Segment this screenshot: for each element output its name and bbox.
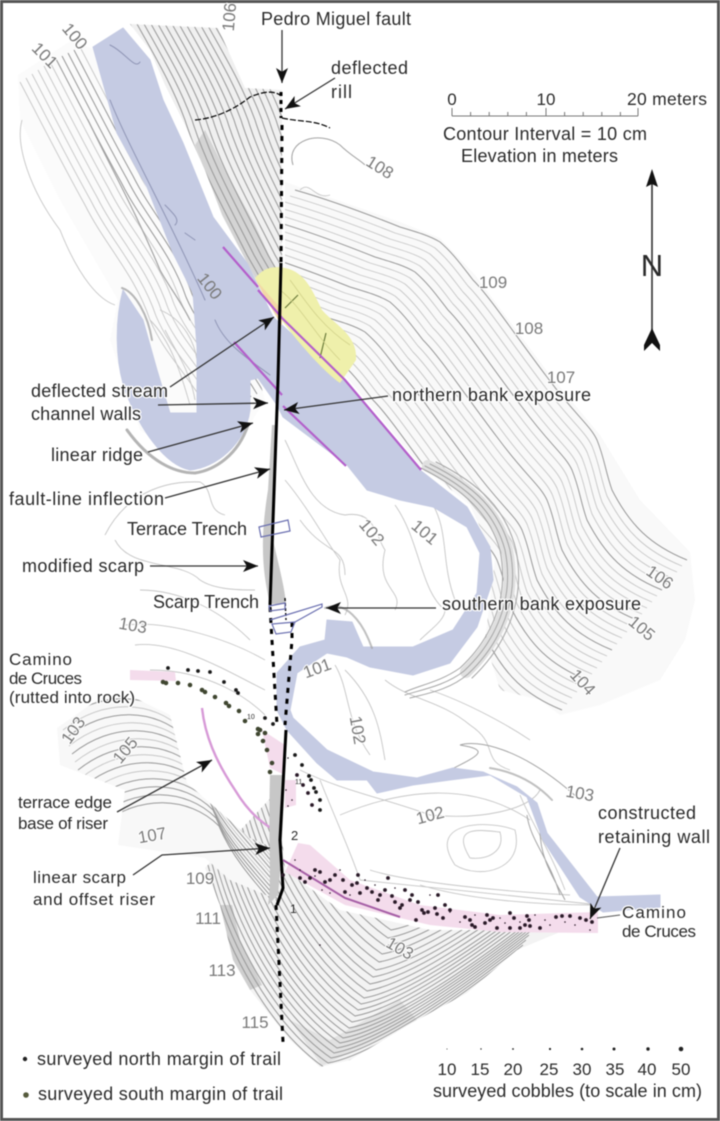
elevation labels: 108 [515, 319, 543, 338]
elevation labels: 11 [295, 779, 302, 786]
elevation labels: 101 [301, 655, 334, 682]
callout labels: constructed [598, 803, 696, 823]
contours: central terrace [20, 120, 600, 905]
elevation labels: 113 [208, 961, 236, 980]
scarp trench [269, 603, 285, 611]
scale bar: 20 meters [627, 89, 707, 109]
elevation labels: 102 [355, 515, 388, 549]
elevation labels: 115 [241, 1013, 269, 1032]
callout labels: and offset riser [33, 890, 155, 909]
legend: surveyed cobbles: 40 [638, 1060, 656, 1079]
callout labels: Camino [622, 903, 686, 922]
elevation labels: 105 [625, 612, 659, 645]
callout labels: Terrace Trench [127, 519, 247, 539]
deflected rill [195, 92, 280, 120]
callout labels: base of riser [18, 814, 108, 833]
solid fault trace north [270, 263, 281, 605]
callout labels: retaining wall [598, 827, 710, 847]
panel: blue stream channel [93, 28, 660, 912]
elevation labels: 101 [28, 39, 61, 72]
callout labels: Camino [9, 650, 72, 669]
purple bank lines [223, 247, 421, 470]
callout labels: terrace edge [18, 793, 112, 812]
elevation labels: 1 [290, 902, 297, 916]
legend: surveyed cobbles: 35 [606, 1060, 624, 1079]
north margin points [168, 668, 320, 810]
elevation labels: 103 [383, 933, 417, 964]
scale bar [443, 89, 707, 166]
legend: surveyed cobbles: surveyed cobbles (to scale in cm) [433, 1081, 702, 1101]
elevation labels: 111 [195, 909, 221, 928]
elevation labels: 102 [414, 803, 446, 828]
scale bar: 0 [447, 90, 457, 109]
legend: surveyed cobbles: 15 [471, 1060, 489, 1079]
callout labels: channel walls [31, 404, 141, 424]
callout labels: Scarp Trench [153, 592, 259, 612]
scale notes: Elevation in meters [461, 146, 618, 166]
callout labels: southern bank exposure [442, 594, 641, 614]
cobble dots [283, 870, 592, 928]
legend: surveyed cobbles: 10 [438, 1060, 456, 1079]
southern bank exposure [270, 604, 322, 634]
legend: surveyed cobbles: 20 [504, 1060, 522, 1079]
elevation labels: 107 [136, 824, 168, 847]
pink trail band [130, 670, 598, 933]
callout labels: (rutted into rock) [9, 688, 135, 707]
legend: surveyed cobbles: 25 [540, 1060, 558, 1079]
elevation labels: 105 [109, 733, 142, 767]
callout labels: linear scarp [33, 868, 126, 887]
legend: surveyed cobbles [433, 1047, 702, 1101]
elevation labels: 103 [117, 614, 149, 637]
elevation labels: 104 [566, 665, 599, 699]
legend: trail margins: surveyed south margin of trail [38, 1084, 283, 1104]
callout labels: de Cruces [622, 922, 696, 941]
callout labels: deflected [331, 58, 408, 78]
callout labels: Pedro Miguel fault [261, 9, 411, 29]
elevation labels: 100 [58, 19, 91, 53]
legend: surveyed cobbles: 50 [672, 1060, 690, 1079]
callout labels: de Cruces [9, 669, 82, 688]
legend: trail margins [23, 1049, 283, 1104]
legend: trail margins: surveyed north margin of trail [37, 1049, 281, 1069]
elevation labels: 106 [643, 561, 677, 593]
scale notes [443, 124, 647, 166]
callout labels: modified scarp [22, 556, 144, 576]
elevation labels: 103 [564, 782, 596, 805]
callout labels: rill [331, 82, 352, 102]
terrace trench [259, 520, 290, 537]
main channel with western lobe and southern reach [93, 28, 660, 912]
scale notes: Contour Interval = 10 cm [443, 124, 647, 144]
elevation labels: 102 [346, 714, 369, 746]
scarp shading [263, 425, 286, 905]
callout labels: deflected stream [31, 381, 168, 401]
legend: surveyed cobbles: 30 [573, 1060, 591, 1079]
elevation labels: 108 [363, 152, 397, 183]
elevation labels: 107 [547, 368, 575, 387]
elevation labels: 109 [186, 869, 214, 888]
elevation labels: 101 [408, 516, 442, 549]
callout labels: northern bank exposure [392, 385, 591, 405]
contours: western bank [19, 48, 263, 398]
channel bank hachures [88, 45, 552, 800]
scale bar: 10 [537, 90, 555, 109]
north arrow [641, 169, 663, 351]
panel: yellow northern exposure patch [255, 267, 356, 383]
elevation labels: 103 [57, 713, 89, 747]
arrows [117, 30, 620, 919]
elevation labels: 109 [479, 273, 507, 292]
elevation labels: 2 [291, 828, 298, 843]
elevation labels: 10 [247, 714, 255, 721]
dotted fault traces [270, 125, 292, 1042]
contours: eastern slope [284, 188, 688, 712]
contours: southern hillslope [206, 799, 556, 1067]
contours: western hill [62, 698, 278, 900]
elevation labels: 100 [193, 269, 226, 303]
fault line [195, 92, 330, 1042]
solid fault trace south [277, 730, 286, 905]
surveyed trail points [163, 668, 592, 945]
elevation labels: 106 [219, 2, 240, 32]
callout labels: linear ridge [51, 445, 143, 465]
callout labels: fault-line inflection [9, 489, 164, 509]
north arrow: N [641, 248, 663, 283]
contours: slope north of channel [130, 24, 283, 278]
trench outlines [259, 520, 322, 634]
south margin points [163, 682, 272, 772]
terrace edge line [202, 708, 279, 833]
